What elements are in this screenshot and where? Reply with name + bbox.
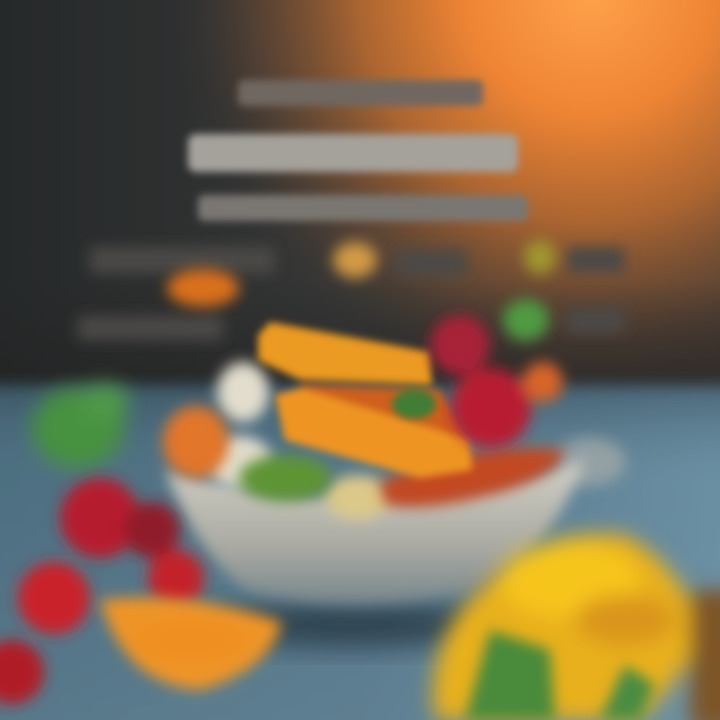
bowl of food — [163, 315, 626, 604]
table shadow under bowl — [200, 603, 500, 647]
green garnish centre — [392, 389, 436, 419]
green herbs left — [32, 384, 129, 468]
red tomatoes left — [0, 478, 204, 704]
orange glow — [140, 0, 720, 400]
small icons beside text — [167, 240, 556, 341]
blurred title text — [188, 80, 528, 221]
yellow mango right — [433, 534, 720, 720]
green mint leaves right — [465, 630, 655, 720]
blurred columns of text — [78, 247, 625, 340]
blue table surface — [0, 385, 720, 720]
bowl body — [165, 460, 585, 604]
orange slice — [100, 598, 282, 690]
red berries in bowl — [430, 315, 563, 448]
red fill under sticks — [380, 448, 565, 507]
green leaf in bowl — [239, 455, 331, 501]
bowl handle rim right — [554, 438, 626, 486]
orange sticks — [258, 322, 472, 478]
wall shading near the table — [0, 0, 720, 400]
white food pieces — [208, 362, 392, 519]
dark wall background — [0, 0, 720, 400]
orange round — [163, 406, 229, 478]
